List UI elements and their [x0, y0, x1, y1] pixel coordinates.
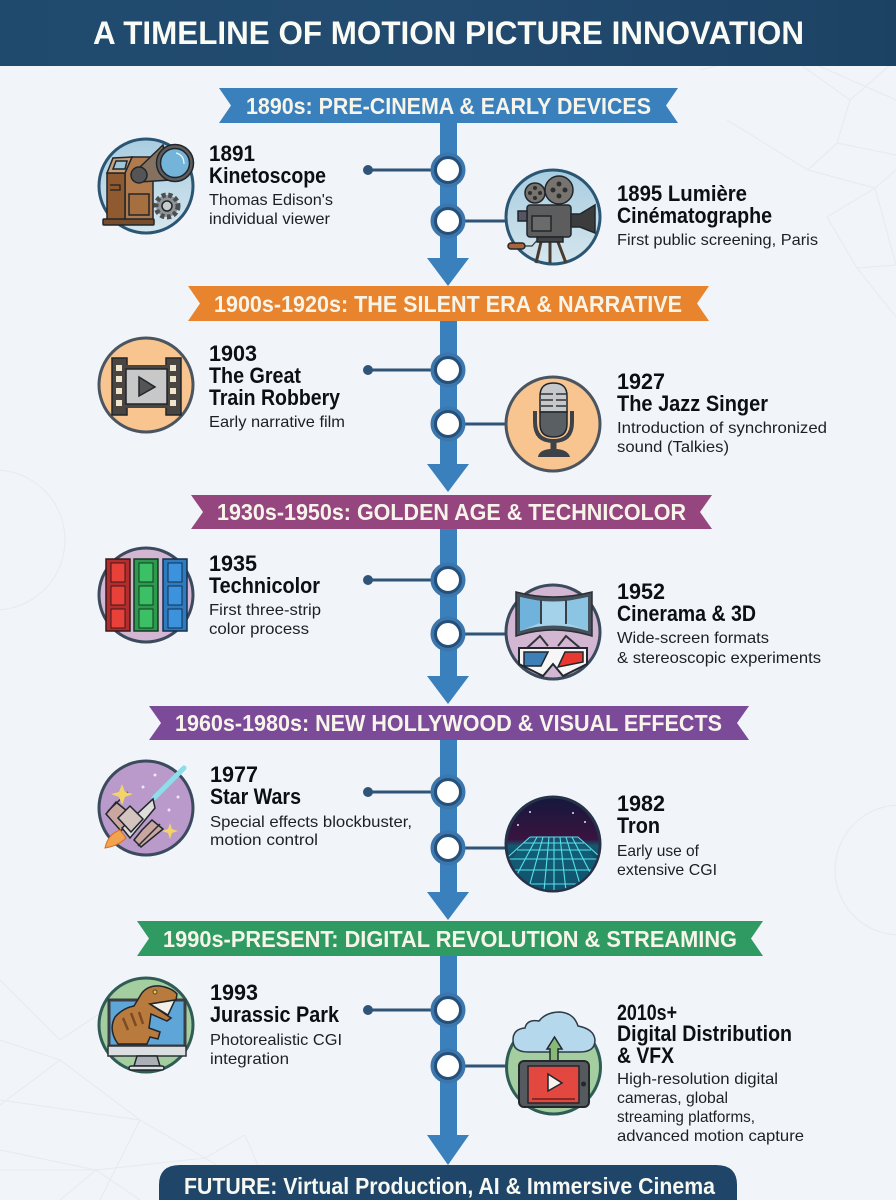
section banner: 1990s-present: 1990s-PRESENT: DIGITAL REVOLUTION & STREAMING — [163, 926, 737, 952]
text: 1977 Star Wars: Special effects blockbuster, — [210, 814, 412, 831]
title bar — [0, 0, 896, 66]
text: 2010s+ Digital Distribution and VFX: & VFX — [617, 1043, 674, 1068]
text: 1927 The Jazz Singer: Introduction of synchronized — [617, 420, 827, 437]
text: 1993 Jurassic Park: Photorealistic CGI — [210, 1032, 342, 1049]
text: 1993 Jurassic Park — [210, 980, 342, 1068]
section banner: 1930s-1950s: 1930s-1950s: GOLDEN AGE & TECHNICOLOR — [217, 499, 686, 525]
text: 1903 The Great Train Robbery — [209, 341, 345, 431]
text: 1977 Star Wars — [210, 762, 412, 849]
text: 2010s+ Digital Distribution and VFX: Digital Distribution — [617, 1021, 792, 1046]
text: 1927 The Jazz Singer: 1927 — [617, 369, 665, 394]
text: 1903 The Great Train Robbery: Early narrative film — [209, 414, 345, 431]
text: 1977 Star Wars: Star Wars — [210, 784, 301, 809]
text: 1993 Jurassic Park: integration — [210, 1051, 289, 1068]
text: 1895 Lumiere: 1895 Lumière — [617, 181, 747, 206]
text: 2010s+ Digital Distribution and VFX: streaming platforms, — [617, 1109, 755, 1126]
text: 2010s+ Digital Distribution and VFX — [617, 1000, 804, 1145]
icon: cinerama screen and 3D glasses — [506, 585, 600, 679]
text: 1935 Technicolor: 1935 — [209, 551, 257, 576]
text: 1993 Jurassic Park: Jurassic Park — [210, 1002, 340, 1027]
text: 1927 The Jazz Singer — [617, 369, 827, 456]
text: 1952 Cinerama and 3D: 1952 — [617, 579, 665, 604]
text: 1927 The Jazz Singer: sound (Talkies) — [617, 439, 729, 456]
text: 1982 Tron: Tron — [617, 813, 660, 838]
connectors and nodes — [363, 154, 506, 1082]
icon: three-strip film — [99, 548, 193, 642]
section banner: 1960s-1980s: 1960s-1980s: NEW HOLLYWOOD & VISUAL EFFECTS — [175, 710, 722, 736]
text: 1927 The Jazz Singer: The Jazz Singer — [617, 391, 768, 416]
text: 1952 Cinerama and 3D: & stereoscopic experiments — [617, 650, 821, 667]
future banner: FUTURE: Virtual Production, AI & Immersive Cinema — [184, 1173, 715, 1199]
text: 2010s+ Digital Distribution and VFX: cameras, global — [617, 1090, 728, 1107]
icon: tron neon grid — [504, 796, 602, 892]
text: 2010s+ Digital Distribution and VFX: High-resolution digital — [617, 1071, 778, 1088]
icon: star wars spaceship — [99, 761, 193, 855]
text: 1952 Cinerama and 3D: Cinerama & 3D — [617, 601, 756, 626]
text: 1891 Kinetoscope: Kinetoscope — [209, 163, 326, 188]
text: 1903 The Great Train Robbery: Train Robbery — [209, 385, 341, 410]
text: 1982 Tron: Early use of — [617, 843, 700, 860]
text: 1977 Star Wars: motion control — [210, 832, 318, 849]
text: 1891 Kinetoscope — [209, 141, 333, 228]
text: 1982 Tron: 1982 — [617, 791, 665, 816]
text: 1895 Lumiere — [617, 181, 818, 249]
text: 1935 Technicolor: First three-strip — [209, 602, 321, 619]
text: 1935 Technicolor — [209, 551, 321, 638]
icon: film camera — [506, 170, 600, 264]
text: 1903 The Great Train Robbery: The Great — [209, 363, 302, 388]
icon: cloud upload and tablet — [506, 1012, 600, 1114]
text: 1993 Jurassic Park: 1993 — [210, 980, 258, 1005]
section banner: 1900s-1920s: 1900s-1920s: THE SILENT ERA & NARRATIVE — [214, 291, 682, 317]
icon: dinosaur on monitor — [99, 978, 193, 1072]
text: 1891 Kinetoscope: 1891 — [209, 141, 255, 166]
section banner: 1890s: 1890s: PRE-CINEMA & EARLY DEVICES — [246, 93, 651, 119]
text: 1935 Technicolor: color process — [209, 621, 309, 638]
text: 1982 Tron — [617, 791, 717, 879]
icon: microphone — [506, 377, 600, 471]
timeline spine with arrows — [427, 122, 469, 1165]
text: 2010s+ Digital Distribution and VFX: 2010s+ — [617, 1000, 677, 1025]
future banner — [159, 1165, 737, 1200]
icon: kinetoscope — [99, 139, 194, 233]
text: 1952 Cinerama and 3D: Wide-screen formats — [617, 630, 769, 647]
text: 1952 Cinerama and 3D — [617, 579, 821, 667]
text: 1982 Tron: extensive CGI — [617, 862, 717, 879]
text: 1891 Kinetoscope: Thomas Edison's — [209, 192, 333, 209]
text: 1891 Kinetoscope: individual viewer — [209, 211, 331, 228]
text: 1895 Lumiere: Cinématographe — [617, 203, 772, 228]
text: 1977 Star Wars: 1977 — [210, 762, 258, 787]
text: 1895 Lumiere: First public screening, Paris — [617, 232, 818, 249]
text: 1903 The Great Train Robbery: 1903 — [209, 341, 257, 366]
text: 2010s+ Digital Distribution and VFX: advanced motion capture — [617, 1128, 804, 1145]
section banner: 1890s — [219, 88, 678, 123]
title bar: A TIMELINE OF MOTION PICTURE INNOVATION — [93, 15, 804, 51]
text: 1935 Technicolor: Technicolor — [209, 573, 320, 598]
icon: film strip with play — [99, 338, 193, 432]
